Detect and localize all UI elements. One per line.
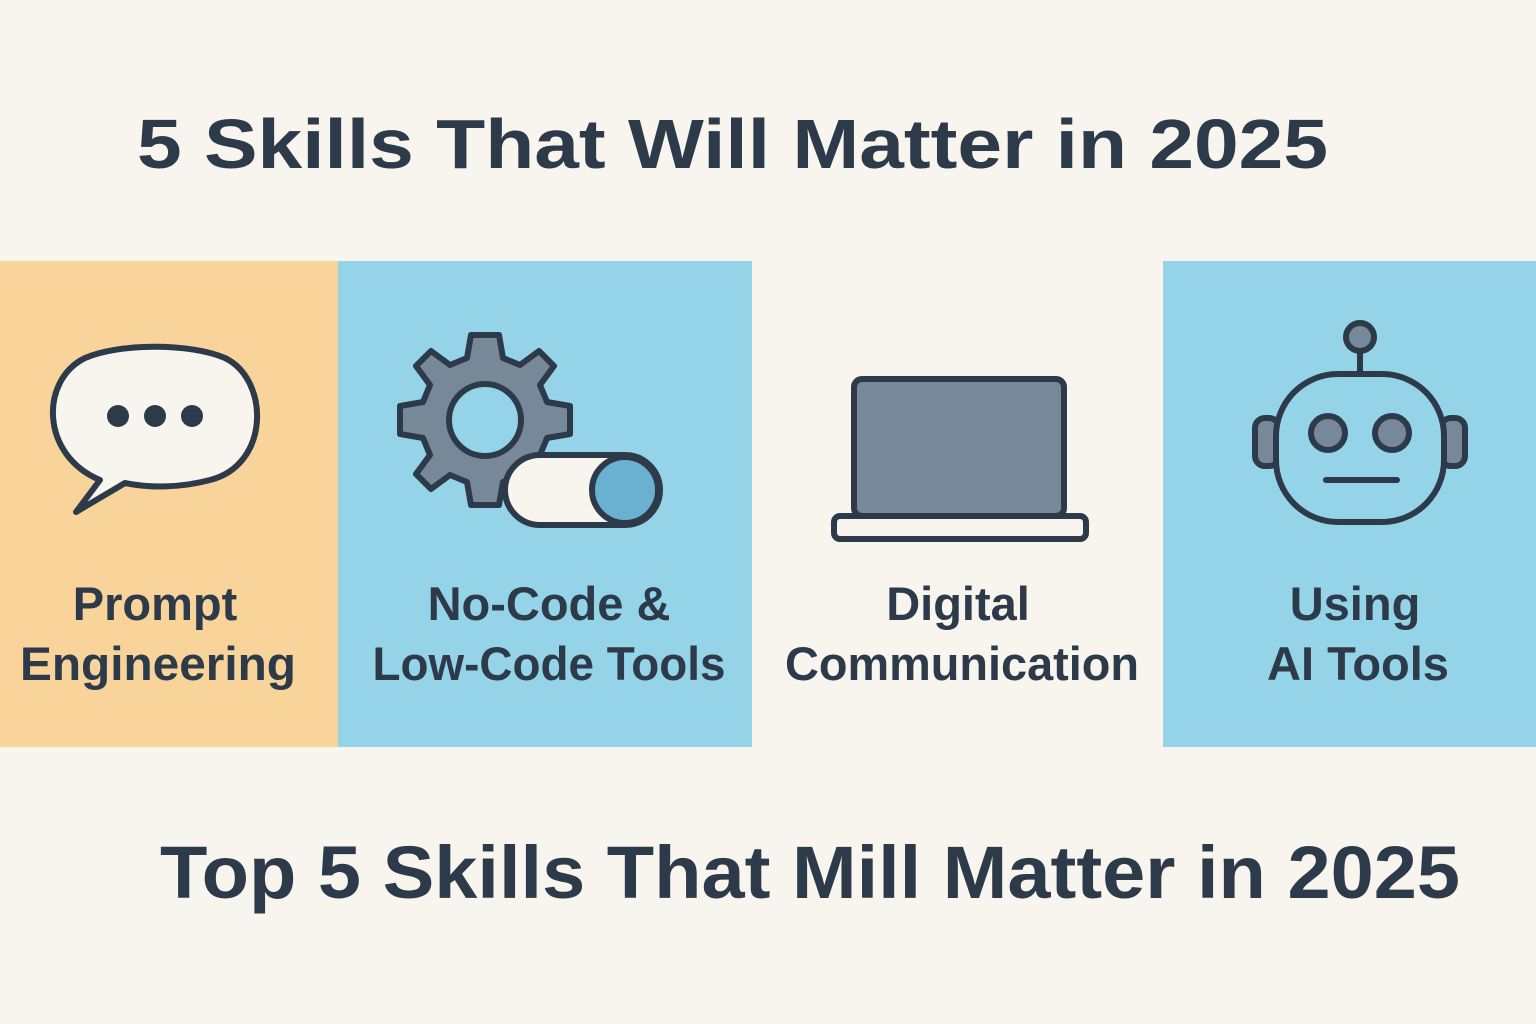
panel: no-code — [338, 261, 752, 747]
label: no-code: Low-Code Tools — [372, 637, 726, 690]
label: digital communication: Digital — [886, 577, 1030, 630]
panel: prompt engineering — [0, 261, 338, 747]
panel: using ai tools — [1163, 261, 1536, 747]
label: prompt engineering: Prompt — [73, 577, 238, 630]
label: digital communication: Communication — [785, 637, 1139, 690]
label: digital communication — [785, 577, 1139, 690]
label: using ai tools — [1267, 577, 1449, 690]
icon: robot — [1255, 323, 1465, 522]
title: 5 Skills That Will Matter in 2025 — [137, 105, 1328, 183]
icon: laptop — [834, 379, 1086, 539]
panel: digital communication — [752, 261, 1163, 747]
label: prompt engineering: Engineering — [20, 637, 296, 690]
icon: speech bubble — [53, 347, 257, 512]
label: using ai tools: AI Tools — [1267, 637, 1449, 690]
bottom title: Top 5 Skills That Mill Matter in 2025 — [160, 831, 1460, 914]
label: no-code: No-Code & — [428, 577, 670, 630]
icon: gear and toggle — [400, 335, 660, 525]
label: prompt engineering — [20, 577, 296, 690]
label: no-code — [372, 577, 726, 690]
label: using ai tools: Using — [1290, 577, 1420, 630]
